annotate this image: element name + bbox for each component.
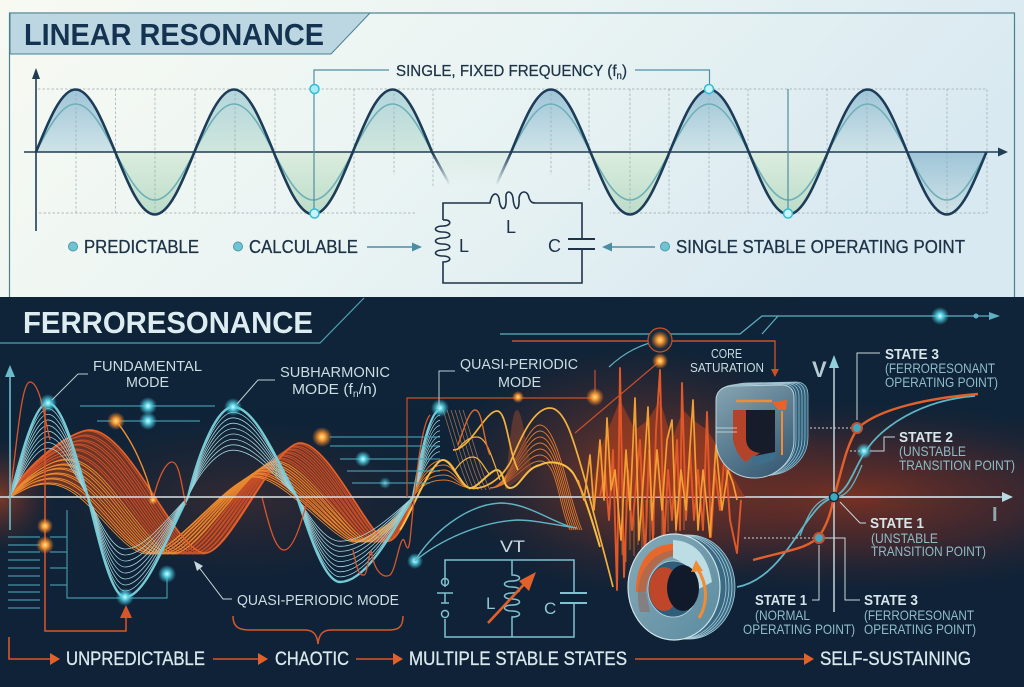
orange mesh ribbon fill: [10, 430, 413, 553]
callout: subharmonic mode: /n): [359, 381, 377, 398]
callout: state 1 normal: OPERATING POINT): [743, 621, 855, 637]
label: calculable: CALCULABLE: [249, 237, 358, 257]
wires: top right signal lines: [500, 307, 1000, 377]
callout: state 3 lower: (FERRORESONANT: [864, 607, 974, 623]
label: predictable: PREDICTABLE: [84, 237, 199, 257]
callout: state 3 lower: STATE 3: [864, 592, 918, 609]
callout: state 3 upper: (FERRORESONANT: [885, 360, 995, 376]
callout: single fixed frequency: ): [622, 63, 627, 80]
flow: behaviour characteristics: MULTIPLE STABLE STATES: [409, 649, 627, 670]
label: core saturation: SATURATION: [690, 360, 764, 375]
heading: ferroresonance: [0, 298, 364, 343]
chart: chaotic spike burst: [578, 368, 745, 590]
callout: quasi-periodic mode top: [439, 356, 578, 408]
diagram: LC circuit: L: [459, 236, 469, 256]
chart: ferroresonant waveform mesh: [0, 365, 1000, 597]
icon: laminated U core: [716, 382, 808, 478]
diagram: nonlinear LC circuit: L: [486, 594, 495, 613]
arrow: calculable to circuit: [367, 242, 422, 252]
callout: state 1 transition: (UNSTABLE: [871, 530, 938, 546]
callout: quasi-periodic mode top: MODE: [498, 374, 541, 391]
callout: subharmonic mode: MODE (f: [292, 381, 350, 398]
label: core saturation: [690, 346, 764, 375]
callout: state 1 transition: STATE 1: [870, 515, 924, 532]
callout: fundamental mode: [52, 358, 202, 400]
chart: V-I saturation curves: I: [992, 504, 998, 526]
callout: state 3 upper: [857, 346, 998, 420]
callout: state 3 upper: STATE 3: [885, 346, 939, 363]
callout: state 1 normal: (NORMAL: [755, 607, 810, 623]
heading: ferroresonance: FERRORESONANCE: [23, 305, 313, 340]
sub-elements: data lines and glowing nodes: [8, 353, 668, 631]
callout: quasi-periodic mode bottom: [194, 561, 399, 609]
callout: subharmonic mode: n: [353, 389, 359, 400]
callout: fundamental mode: FUNDAMENTAL: [93, 358, 202, 375]
callout: quasi-periodic mode top: QUASI-PERIODIC: [460, 356, 578, 373]
callout: state 1 normal: [743, 545, 855, 637]
callout: state 3 upper: OPERATING POINT): [885, 374, 998, 390]
chart: V-I saturation curves: V: [812, 357, 827, 382]
diagram: nonlinear LC circuit: C: [544, 599, 556, 618]
callout: subharmonic mode: SUBHARMONIC: [280, 364, 390, 381]
arrow: stable point to capacitor: [602, 242, 655, 252]
callout: state 3 lower: [825, 538, 976, 637]
diagram: LC circuit: C: [548, 236, 561, 256]
diagram: LC circuit: L: [506, 217, 516, 237]
callout: fundamental mode: MODE: [126, 374, 169, 391]
label: single stable operating point: SINGLE STABLE OPERATING POINT: [676, 237, 965, 257]
callout: subharmonic mode: [237, 364, 390, 404]
callout: state 2: (UNSTABLE: [899, 443, 966, 459]
panel: linear resonance: [0, 0, 1024, 313]
flow: behaviour characteristics: UNPREDICTABLE: [66, 649, 205, 670]
callout: single fixed frequency: [310, 63, 792, 218]
callout: state 2: STATE 2: [899, 429, 953, 446]
callout: single fixed frequency: SINGLE, FIXED FREQUENCY (f: [396, 63, 622, 80]
diagram: LC circuit: [436, 192, 595, 283]
flow: behaviour characteristics: SELF-SUSTAINING: [820, 649, 971, 670]
flow: behaviour characteristics: [9, 637, 971, 670]
brace: chaotic grouping: [233, 616, 403, 644]
flow: behaviour characteristics: CHAOTIC: [275, 649, 349, 670]
callout: state 1 normal: STATE 1: [755, 592, 807, 609]
chart: V-I saturation curves: [737, 355, 1013, 612]
callout: single fixed frequency: n: [617, 71, 622, 82]
diagram: nonlinear LC circuit: VT: [500, 537, 525, 556]
heading: linear resonance: LINEAR RESONANCE: [24, 17, 324, 52]
callout: quasi-periodic mode bottom: QUASI-PERIODIC MODE: [237, 592, 399, 609]
red chaotic trace: [10, 382, 430, 576]
teal mesh wave: [10, 403, 440, 597]
yellow quasi-periodic waves: [400, 408, 613, 587]
orange mesh wave: [8, 430, 413, 554]
icon: toroidal core: [628, 534, 735, 640]
quasi-periodic mesh: [413, 410, 582, 530]
diagram: nonlinear LC circuit: [437, 537, 587, 637]
callout: state 1 transition: TRANSITION POINT): [871, 543, 986, 559]
callout: state 2: [870, 429, 1015, 473]
label: core saturation: CORE: [711, 346, 742, 361]
panel: ferroresonance: [0, 297, 1024, 687]
callout: state 3 lower: OPERATING POINT): [864, 621, 976, 637]
callout: state 1 transition: [840, 502, 986, 559]
chart: single frequency sine wave: [24, 68, 1008, 231]
